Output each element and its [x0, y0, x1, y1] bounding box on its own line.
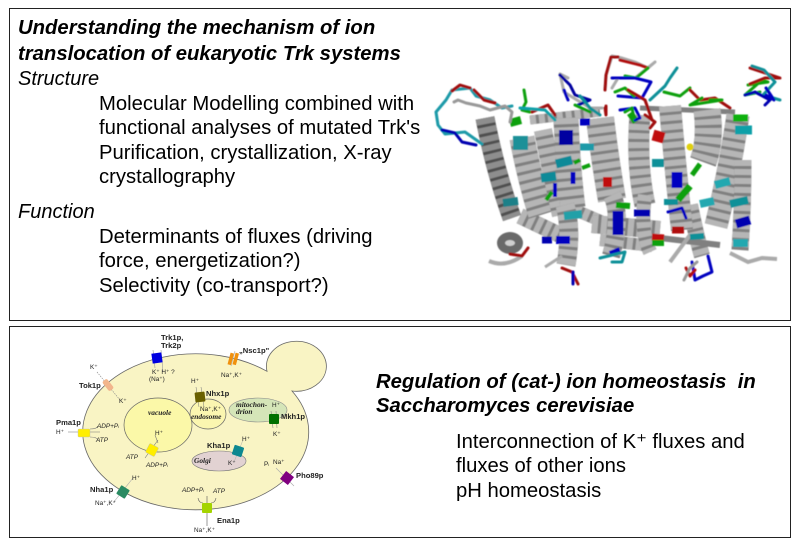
heading: regulation of ion homeostasis: Regulation of (cat-) ion homeostasis in	[376, 371, 756, 393]
transporter: Ena1p: Ena1p	[217, 516, 240, 525]
coloured residues	[503, 113, 752, 254]
transporter: Trk1p Trk2p: K⁺ H⁺ ?	[152, 369, 175, 376]
text block: function questions: force, energetization?)	[99, 250, 300, 272]
transporter: Mkh1p	[269, 402, 305, 438]
transporter: Trk1p Trk2p	[149, 333, 183, 383]
transporter: Nha1p: Nha1p	[90, 485, 114, 494]
transporter: Pho89p	[264, 459, 324, 486]
transporter: Kha1p: K⁺	[228, 460, 236, 467]
yellow residue	[686, 144, 694, 150]
subheading: function: Function	[18, 201, 95, 223]
transporter: Pho89p: Pi	[264, 461, 269, 468]
transporter: Pma1p: Pma1p	[56, 418, 81, 427]
transporter: Ena1p	[181, 487, 240, 534]
vacuole	[124, 398, 192, 452]
transporter: Nhx1p	[191, 378, 230, 413]
yeast cell diagram	[56, 333, 326, 534]
text block: structure methods: crystallography	[99, 166, 236, 188]
heading: regulation of ion homeostasis: Saccharomyces cerevisiae	[376, 395, 634, 417]
transporter: vacuolar ATPase: H⁺	[155, 430, 163, 437]
transporter: Trk1p Trk2p: Trk1p,	[161, 333, 183, 342]
transporter: Kha1p: H⁺	[242, 436, 250, 443]
transporter: Pma1p: H⁺	[56, 429, 64, 436]
transporter: Ena1p: ATP	[212, 488, 226, 495]
transporter: vacuolar ATPase: ATP	[125, 454, 139, 461]
transporter: Nsc1p	[221, 346, 270, 379]
mitochondrion: mitochon-	[236, 400, 268, 409]
text block: structure methods: Purification, crystallization, X-ray	[99, 142, 392, 164]
transporter: Ena1p: Na⁺,K⁺	[194, 527, 215, 534]
mitochondrion: drion	[236, 407, 252, 416]
text block: interconnection of fluxes: fluxes of other ions	[456, 455, 626, 477]
transporter: Pho89p: Pho89p	[296, 471, 324, 480]
transmembrane helices	[485, 106, 777, 267]
subheading: structure: Structure	[18, 68, 99, 90]
foot of first helix	[497, 232, 523, 254]
transporter: Trk1p Trk2p: (Na⁺)	[149, 376, 165, 383]
transporter: Nsc1p: „Nsc1p"	[239, 346, 270, 355]
endosome	[190, 399, 226, 429]
transporter: Ena1p: ADP+Pi	[181, 487, 204, 494]
transporter: Nha1p	[90, 475, 140, 507]
transporter: Pma1p	[56, 418, 119, 444]
transporter: Pho89p: Na⁺	[273, 459, 285, 466]
endosome: endosome	[191, 412, 222, 421]
panel: ion homeostasis	[10, 326, 790, 538]
text block: structure methods: functional analyses of mutated Trk's	[99, 117, 420, 139]
transporter: Nhx1p: Na⁺,K⁺	[200, 406, 221, 413]
text block: interconnection of fluxes: Interconnection of K⁺ fluxes and	[456, 431, 745, 453]
transporter: Tok1p	[79, 364, 127, 405]
text block: function questions: Selectivity (co-transport?)	[99, 275, 329, 297]
cell body with bud	[83, 341, 326, 510]
golgi: Golgi	[194, 456, 212, 465]
transporter: vacuolar ATPase: ADP+Pi	[145, 462, 168, 469]
heading: understanding the mechanism: Understanding the mechanism of ion	[18, 17, 375, 39]
mitochondrion	[229, 398, 287, 422]
transporter: Tok1p: K⁺	[119, 398, 127, 405]
transporter: Trk1p Trk2p: Trk2p	[161, 341, 182, 350]
transporter: Nha1p: Na⁺,K⁺	[95, 500, 116, 507]
text block: interconnection of fluxes: pH homeostasis	[456, 480, 601, 502]
transporter: Nhx1p: Nhx1p	[206, 389, 230, 398]
bottom loops	[510, 208, 712, 284]
transporter: Tok1p: Tok1p	[79, 381, 101, 390]
transporter: Mkh1p: K⁺	[273, 431, 281, 438]
transporter: Pma1p: ADP+Pi	[96, 423, 119, 430]
text block: function questions: Determinants of fluxes (driving	[99, 226, 372, 248]
molecular model of Trk protein	[436, 56, 780, 284]
vacuole: vacuole	[148, 408, 172, 417]
transporter: Kha1p: Kha1p	[207, 441, 231, 450]
panel: Trk mechanism	[10, 8, 790, 320]
transporter: Pma1p: ATP	[95, 437, 109, 444]
transporter: vacuolar ATPase	[125, 430, 168, 469]
transporter: Mkh1p: H⁺	[272, 402, 280, 409]
golgi	[192, 451, 246, 471]
top loops	[436, 56, 780, 145]
transporter: Kha1p	[207, 436, 250, 467]
transporter: Tok1p: K⁺	[90, 364, 98, 371]
transporter: Nhx1p: H⁺	[191, 378, 199, 385]
transporter: Nha1p: H⁺	[132, 475, 140, 482]
heading: understanding the mechanism: translocation of eukaryotic Trk systems	[18, 43, 401, 65]
text block: structure methods: Molecular Modelling combined with	[99, 93, 414, 115]
transporter: Mkh1p: Mkh1p	[281, 412, 305, 421]
transporter: Nsc1p: Na⁺,K⁺	[221, 372, 242, 379]
bottom connecting helices	[520, 108, 735, 256]
